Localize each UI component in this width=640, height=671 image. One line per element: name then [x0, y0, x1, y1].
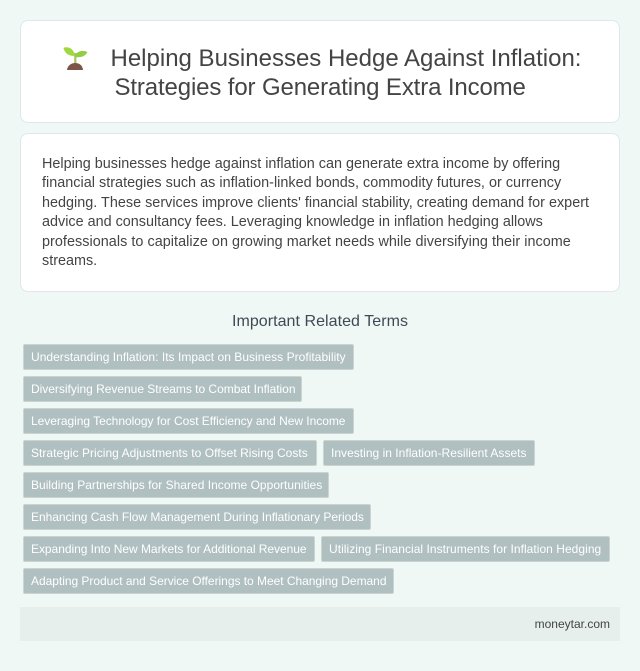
- tag: [321, 536, 610, 562]
- text block: description: [42, 156, 589, 269]
- tag: [23, 440, 317, 466]
- tag: Diversifying Revenue Streams to Combat Inflation: [31, 382, 296, 396]
- tag: Expanding Into New Markets for Additional Revenue: [31, 542, 307, 556]
- title: Strategies for Generating Extra Income: [114, 74, 526, 101]
- tag: Understanding Inflation: Its Impact on Business Profitability: [31, 350, 346, 364]
- panel: description: [20, 133, 620, 292]
- title: Helping Businesses Hedge Against Inflation:: [110, 45, 581, 72]
- tag: [323, 440, 535, 466]
- tag: Strategic Pricing Adjustments to Offset Rising Costs: [31, 446, 308, 460]
- tag: Utilizing Financial Instruments for Inflation Hedging: [329, 542, 601, 556]
- tag: [23, 504, 371, 530]
- tag: [23, 536, 315, 562]
- tag: Enhancing Cash Flow Management During Inflationary Periods: [31, 510, 364, 524]
- tag list: [23, 344, 610, 594]
- tag: Leveraging Technology for Cost Efficiency and New Income: [31, 414, 345, 428]
- tag: [23, 568, 394, 594]
- text block: description: financial strategies such as inflation-linked bonds, commodity futures, or currency: [42, 175, 561, 191]
- tag: Adapting Product and Service Offerings to Meet Changing Demand: [31, 574, 386, 588]
- text block: description: Helping businesses hedge against inflation can generate extra income by offering: [42, 156, 560, 172]
- icon: seedling: [64, 47, 88, 70]
- title: [110, 45, 581, 101]
- tag: [23, 408, 354, 434]
- tag: Building Partnerships for Shared Income Opportunities: [31, 478, 322, 492]
- text block: description: hedging. These services improve clients' financial stability, creating demand for expert: [42, 195, 589, 211]
- footer source text: moneytar.com: [535, 617, 610, 631]
- footer bar: [20, 607, 620, 641]
- text block: description: advice and consultancy fees. Leveraging knowledge in inflation hedging allows: [42, 214, 543, 230]
- tag: Investing in Inflation-Resilient Assets: [331, 446, 527, 460]
- heading: important related terms: Important Related Terms: [232, 313, 408, 330]
- tag: [23, 472, 329, 498]
- tag: [23, 376, 302, 402]
- panel: title card: [20, 20, 620, 123]
- tag: [23, 344, 354, 370]
- text block: description: streams.: [42, 253, 97, 269]
- text block: description: professionals to capitalize on growing market needs while diversifying their income: [42, 234, 571, 250]
